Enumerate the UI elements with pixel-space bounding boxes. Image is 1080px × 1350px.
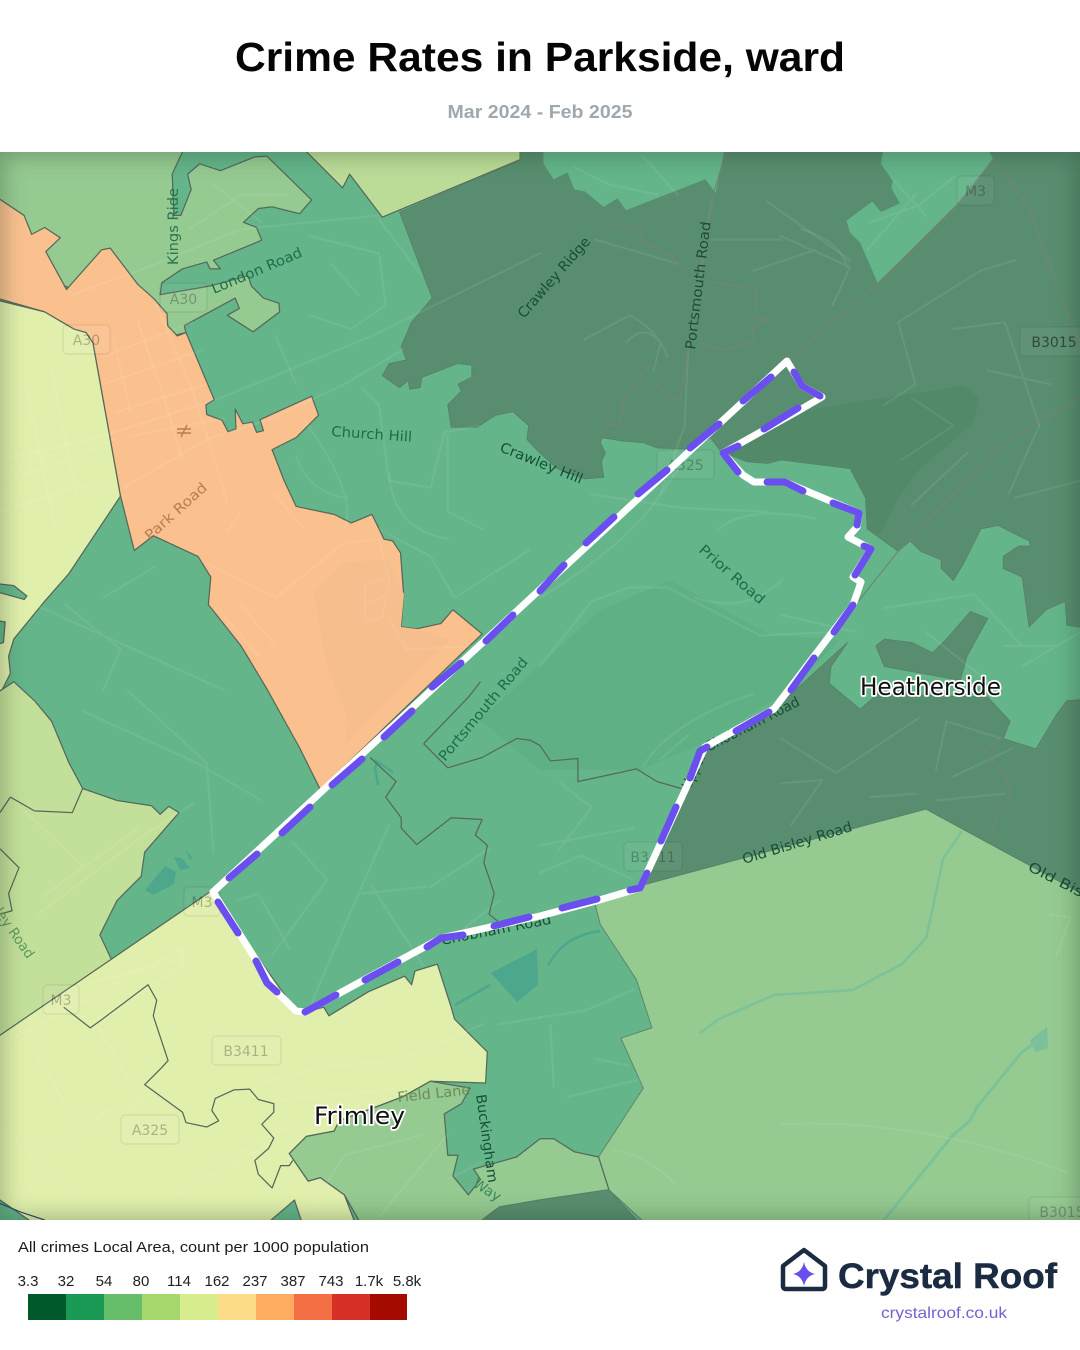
legend tick labels: 3.3: [18, 1273, 38, 1290]
region: west pale yellow: [0, 299, 121, 694]
road shield: B3015 south: [1029, 1197, 1080, 1226]
label: Chobham Road upper section: Chobham Road: [703, 694, 802, 756]
logo wordmark: Crystal Roof: [838, 1257, 1057, 1296]
ward outline: purple dashes: [218, 372, 871, 1012]
road shield: A30 west: [63, 325, 110, 354]
label: Field Lane: Field Lane: [397, 1082, 471, 1106]
legend tick labels: 32: [58, 1273, 74, 1290]
label: Crawley Hill: Crawley Hill: [498, 440, 585, 488]
label: Way: Way: [470, 1176, 504, 1205]
region: south dark green strip: [482, 1189, 637, 1220]
road shield: B3411: B3411: [223, 1044, 269, 1060]
hillshade patch in ward: [480, 580, 840, 770]
region: west lime: [0, 682, 179, 1040]
boundaries: paths in dark green: [599, 152, 1080, 601]
title: Crime Rates in Parkside, ward: [235, 34, 845, 80]
road shield: M3 centre: M3: [192, 895, 212, 911]
road shield: M3 centre: [184, 887, 220, 916]
road shield: B3411 east: B3411: [630, 850, 676, 866]
road shield: A30 west: A30: [73, 333, 100, 349]
legend tick labels: 387: [280, 1273, 306, 1290]
hillshade patch in dark green: [734, 456, 868, 528]
lobe of dark green within Heatherside: [876, 611, 988, 680]
place label: Frimley: Frimley: [314, 1102, 405, 1130]
legend tick labels: 162: [204, 1273, 230, 1290]
region: south light green: [289, 1081, 609, 1231]
boundaries: paths in south-east dark green: [983, 737, 1012, 840]
legend tick labels: [18, 1273, 422, 1290]
road shield: M3 north-east: M3: [965, 184, 986, 200]
label: London Road: London Road: [209, 245, 305, 298]
legend tick labels: 5.8k: [393, 1273, 422, 1290]
place label: Heatherside: Heatherside: [860, 673, 1001, 701]
map edge vignette: [0, 152, 1080, 1220]
map labels: road and place text: [0, 176, 1080, 1226]
road network south-east: [539, 693, 1013, 1140]
label: Portsmouth Road north: Portsmouth Road: [683, 220, 715, 350]
region: north dark green: [382, 143, 1080, 627]
website link: crystalroof.co.uk: [881, 1305, 1008, 1322]
legend tick labels: 54: [96, 1273, 112, 1290]
road shield: A325 south: [121, 1115, 179, 1144]
railway station icon: [177, 425, 191, 437]
ward boundary: Parkside: [213, 361, 871, 1012]
label: Upper: Upper: [679, 750, 710, 792]
road shield: A30 north: [160, 283, 207, 312]
road shield: B3015 east: [1020, 327, 1080, 356]
label: Old Bisley east: Old Bisl: [1025, 859, 1080, 903]
boundaries: inner ward lines: [0, 682, 681, 1220]
road network south: [82, 690, 541, 1184]
label: Chobham Road: Chobham Road: [440, 912, 553, 949]
road shield: A325 south: A325: [132, 1123, 168, 1139]
subtitle: date range: Mar 2024 - Feb 2025: [448, 102, 632, 122]
water: ponds: [145, 851, 1048, 1052]
icon: house with star: [783, 1250, 825, 1289]
legend: [18, 1239, 422, 1320]
label: Park Road: Park Road: [142, 480, 211, 544]
region: south-east light green: [595, 809, 1080, 1231]
label: Kings Ride: Kings Ride: [166, 188, 182, 265]
region: north lime: [306, 152, 520, 218]
boundaries: small mid-green fragments on west edge: [0, 583, 27, 646]
label: Old Bisley Road: Old Bisley Road: [740, 819, 854, 868]
road shield: A325 north: [657, 450, 714, 479]
legend tick labels: 237: [242, 1273, 268, 1290]
region: high-crime orange: [0, 195, 482, 790]
region: top mid-green patches: [543, 143, 993, 283]
legend tick labels: 1.7k: [355, 1273, 384, 1290]
road shield: M3 south-west: [43, 985, 79, 1014]
region: north-west light green: [0, 143, 312, 336]
region: south-east dark green: [643, 642, 1080, 900]
streams: [375, 760, 1036, 1220]
road shield: B3015 east: B3015: [1031, 335, 1077, 351]
road shield: A325 north: A325: [667, 458, 704, 474]
ward outline: white: [213, 361, 871, 1012]
label: Prior Road: Prior Road: [695, 542, 768, 608]
road shield: B3411: [212, 1036, 281, 1065]
road network: [38, 214, 541, 691]
label: Church Hill: Church Hill: [331, 424, 413, 446]
road shield: M3 south-west: M3: [50, 993, 72, 1009]
legend title: All crimes Local Area, count per 1000 population: [18, 1239, 369, 1256]
legend tick labels: 80: [133, 1273, 149, 1290]
legend tick labels: 743: [318, 1273, 344, 1290]
road shield: A30 north: A30: [170, 292, 197, 308]
road network east: [540, 157, 1080, 684]
label: Buckingham: Buckingham: [472, 1093, 500, 1184]
road shield: B3411 east: [624, 842, 682, 871]
logo: Crystal Roof: [783, 1250, 1057, 1322]
label: Crawley Ridge: Crawley Ridge: [515, 234, 594, 322]
legend colour scale: [28, 1294, 407, 1320]
hillshade patch in orange: [400, 591, 418, 630]
legend tick labels: 114: [167, 1273, 191, 1290]
road shield: M3 north-east: [957, 176, 994, 205]
region: south pale yellow: [0, 892, 487, 1231]
label: Portsmouth Road south: Portsmouth Road: [436, 655, 532, 765]
